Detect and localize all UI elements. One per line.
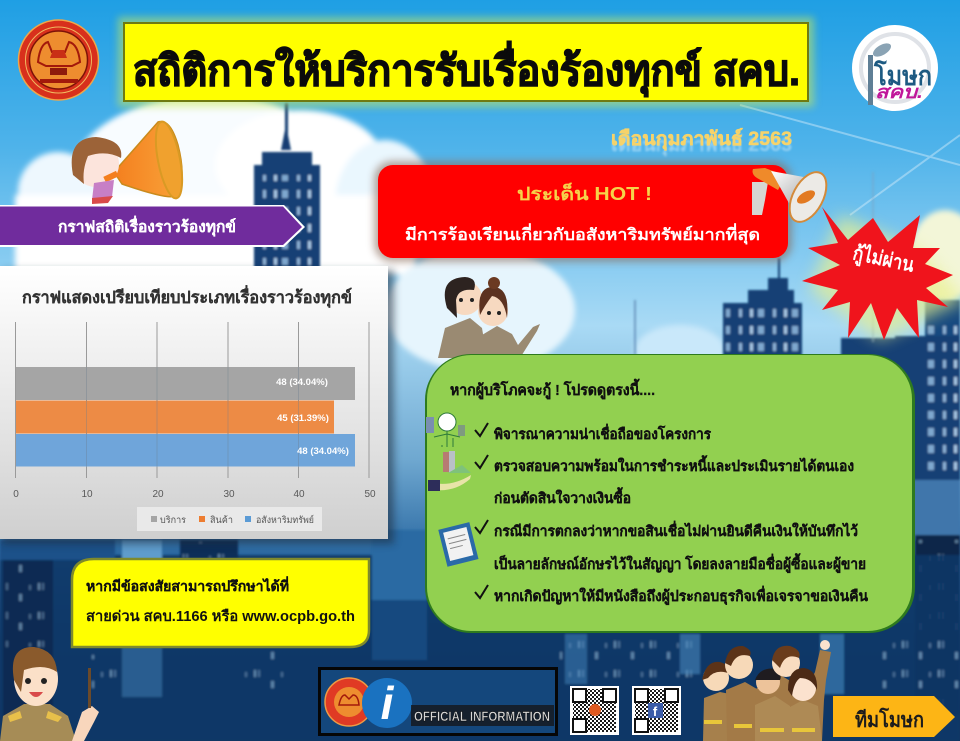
panel: bar chart: อสังหาริมทรัพย์ <box>256 514 314 526</box>
logo: official information: i <box>381 677 395 729</box>
callout: contact information: หากมีข้อสงสัยสามารถปรึกษาได้ที่ <box>86 576 289 594</box>
panel: bar chart: 48 (34.04%) <box>297 446 349 457</box>
icon: officer pointing <box>0 647 99 741</box>
panel: hot issue: ประเด็น HOT ! <box>517 182 652 204</box>
icon: team of officers <box>702 640 831 741</box>
date heading: เดือนกุมภาพันธ์ 2563 <box>611 128 792 151</box>
panel: bar chart: 0 <box>13 489 19 500</box>
advice item 2: ก่อนตัดสินใจวางเงินซื้อ <box>494 487 631 507</box>
logo: official information <box>320 668 556 734</box>
section banner: statistics: กราฟสถิติเรื่องราวร้องทุกข์ <box>58 215 236 237</box>
advice item 2 <box>475 455 854 507</box>
chart title: กราฟแสดงเปรียบเทียบประเภทเรื่องราวร้องทุกข์ <box>22 285 352 308</box>
callout: contact information <box>72 559 369 647</box>
panel: bar chart: บริการ <box>160 515 186 526</box>
title banner: สถิติการให้บริการรับเรื่องร้องทุกข์ สคบ. <box>133 41 800 97</box>
advice item 3 <box>475 520 866 573</box>
panel: bar chart: 45 (31.39%) <box>277 413 329 424</box>
advice item 1 <box>475 423 711 443</box>
panel: bar chart: 10 <box>81 489 93 500</box>
panel: bar chart <box>0 266 394 544</box>
panel: bar chart: 20 <box>152 489 164 500</box>
icon: person weighing phones <box>426 413 465 447</box>
advice item 3: เป็นลายลักษณ์อักษรไว้ในสัญญา โดยลงลายมือชื่อผู้ซื้อและผู้ขาย <box>494 553 866 573</box>
panel: bar chart: สินค้า <box>210 515 233 526</box>
panel: hot issue: มีการร้องเรียนเกี่ยวกับอสังหาริมทรัพย์มากที่สุด <box>405 223 760 245</box>
callout: starburst loan rejected <box>802 207 960 340</box>
logo: Mo Nok Hook <box>852 25 938 111</box>
icon: girl with loudhailer <box>72 120 187 204</box>
advice item 1: พิจารณาความน่าเชื่อถือของโครงการ <box>494 423 711 443</box>
logo: OCPB seal <box>18 20 98 100</box>
logo: official information: OFFICIAL INFORMATION <box>414 708 550 724</box>
title banner <box>118 17 814 107</box>
panel: bar chart: 30 <box>223 489 235 500</box>
callout: contact information: สายด่วน สคบ.1166 หรือ www.ocpb.go.th <box>86 608 355 625</box>
logo: Mo Nok Hook: สคบ. <box>875 82 923 102</box>
icon: QR code Facebook <box>632 686 681 735</box>
date heading: เดือนกุมภาพันธ์ 2563 <box>611 134 792 157</box>
panel: bar chart: 40 <box>293 489 305 500</box>
advice item 4: หากเกิดปัญหาให้มีหนังสือถึงผู้ประกอบธุรกิจเพื่อเจรจาขอเงินคืน <box>494 585 868 605</box>
advice heading: หากผู้บริโภคจะกู้ ! โปรดดูตรงนี้.... <box>450 378 655 400</box>
panel: hot issue <box>374 161 792 262</box>
section banner: statistics <box>0 205 305 247</box>
icon: hand holding house <box>428 451 471 491</box>
icon: two officers <box>438 277 540 358</box>
icon: QR code OCPB <box>570 686 619 735</box>
panel: bar chart: 50 <box>364 489 376 500</box>
arrow: team label: ทีมโมษก <box>855 707 924 732</box>
logo: Mo Nok Hook: โมษก <box>873 59 932 91</box>
icon: QR code Facebook: f <box>653 704 658 719</box>
panel: advice for borrowers <box>425 354 915 633</box>
arrow: team label <box>833 696 955 737</box>
advice item 3: กรณีมีการตกลงว่าหากขอสินเชื่อไม่ผ่านยินดีคืนเงินให้บันทึกไว้ <box>494 520 858 540</box>
icon: megaphone <box>752 166 834 228</box>
callout: starburst loan rejected: กู้ไม่ผ่าน <box>850 241 917 279</box>
advice item 2: ตรวจสอบความพร้อมในการชำระหนี้และประเมินรายได้ตนเอง <box>494 455 854 475</box>
panel: bar chart: 48 (34.04%) <box>276 377 328 388</box>
icon: document and pen <box>438 522 479 567</box>
